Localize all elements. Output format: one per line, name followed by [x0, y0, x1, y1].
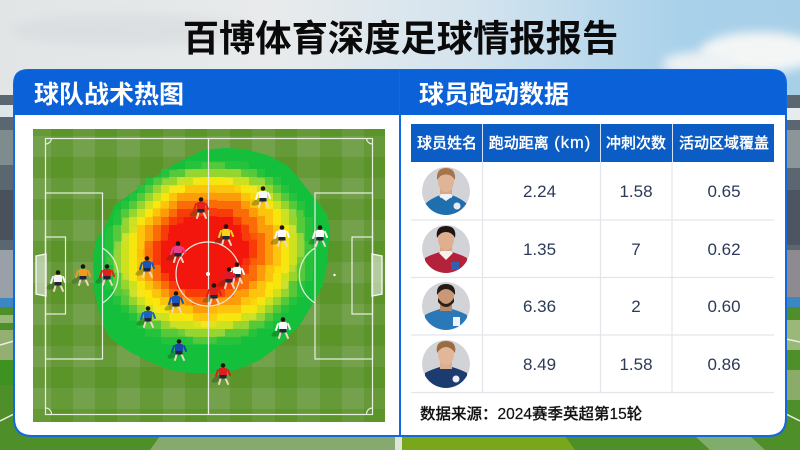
row 1: 0.65: [707, 182, 741, 201]
row 4: 0.86: [707, 355, 741, 374]
panel: player running data: [400, 70, 786, 436]
portrait 4: [422, 340, 470, 389]
table header: 球员姓名: [417, 135, 477, 152]
row 1: 1.58: [619, 182, 653, 201]
panel: tactical heat map: [14, 70, 400, 436]
portrait 1: [422, 167, 470, 216]
row 4: 1.58: [619, 355, 653, 374]
panel heading bar: player running data: 球员跑动数据: [419, 81, 569, 109]
heat map core bands: [105, 161, 313, 345]
data source note: 数据来源：2024赛季英超第15轮: [420, 404, 642, 423]
row 2: 7: [631, 240, 641, 259]
row 2: 0.62: [707, 240, 741, 259]
row 2: 1.35: [523, 240, 556, 259]
panel heading bar: player running data: [400, 70, 786, 115]
pitch lines: [46, 138, 372, 414]
row 4: [422, 340, 741, 389]
title: 百博体育深度足球情报报告: [183, 18, 618, 59]
pitch with heat map: [33, 129, 385, 422]
row 3: 0.60: [707, 297, 741, 316]
table header: [411, 124, 774, 162]
table header: 冲刺次数: [606, 135, 666, 152]
left goal: [36, 254, 46, 296]
center spot and penalty spot: [206, 272, 336, 276]
row 1: [422, 167, 741, 216]
row 4: 8.49: [523, 355, 556, 374]
players: [45, 186, 327, 384]
portrait 2: [422, 225, 470, 274]
table header: 跑动距离 (km): [489, 134, 591, 152]
heat map outer zone: [93, 148, 330, 373]
panel heading bar: tactical heat map: 球队战术热图: [34, 81, 184, 109]
row 3: 2: [631, 297, 641, 316]
right goal: [372, 254, 382, 296]
row 3: [422, 282, 741, 331]
row 3: 6.36: [523, 297, 556, 316]
pitch turf: [33, 129, 385, 422]
panel heading bar: tactical heat map: [14, 70, 400, 115]
table header: 活动区域覆盖: [679, 135, 769, 152]
table grid: [411, 162, 774, 392]
portrait 3: [422, 282, 470, 331]
row 1: 2.24: [523, 182, 556, 201]
row 2: [422, 225, 741, 274]
